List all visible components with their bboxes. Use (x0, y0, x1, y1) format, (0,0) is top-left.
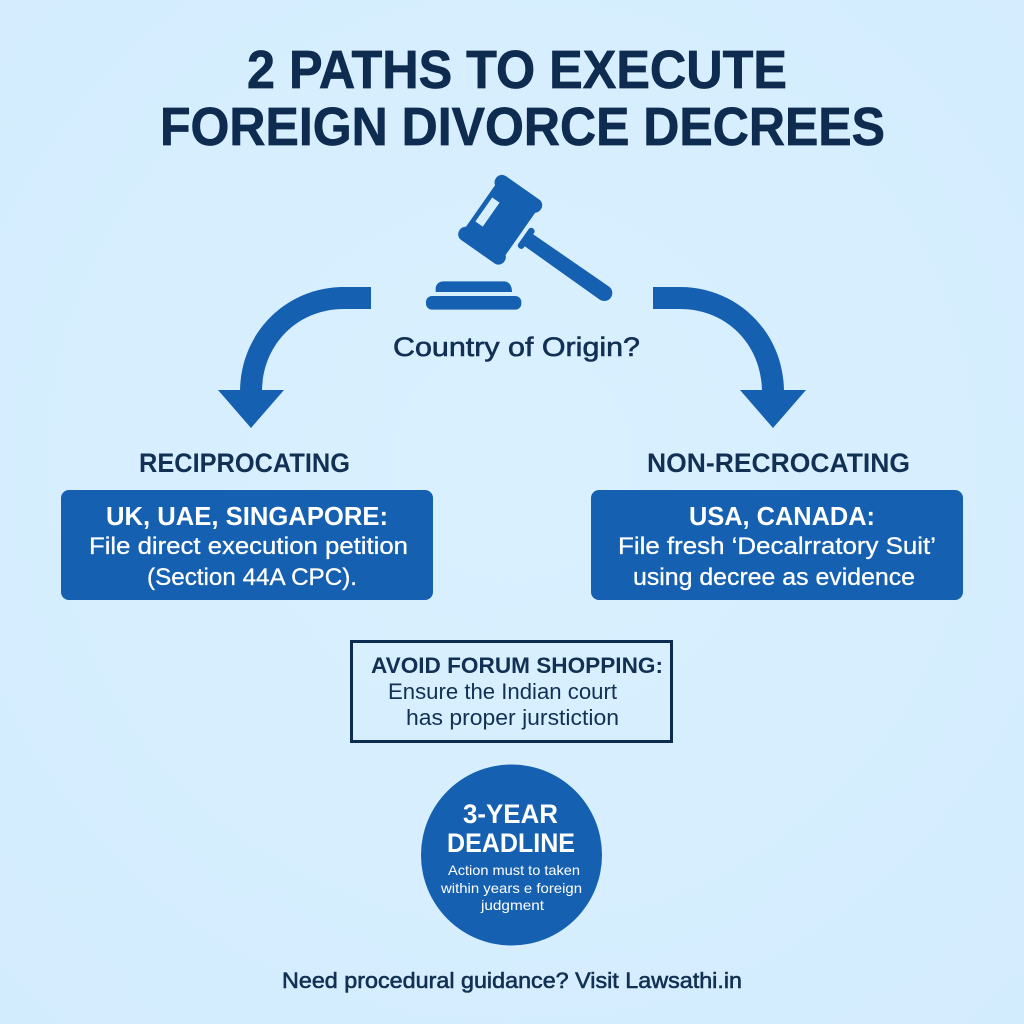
panel: reciprocating countries: File direct execution petition (89, 533, 408, 560)
arrow: left curve to reciprocating (218, 287, 371, 428)
heading: reciprocating: RECIPROCATING (139, 448, 350, 478)
heading: non-reciprocating: NON-RECROCATING (647, 448, 910, 478)
badge: 3-year deadline (421, 764, 602, 946)
title (160, 40, 885, 157)
panel: non-reciprocating countries (591, 490, 963, 600)
panel: non-reciprocating countries: USA, CANADA: (689, 501, 875, 531)
arrow: right curve to non-reciprocating (653, 287, 806, 428)
panel: non-reciprocating countries: using decree as evidence (633, 564, 915, 591)
badge: 3-year deadline: Action must to taken (448, 862, 580, 878)
badge: 3-year deadline: within years e foreign (440, 880, 582, 896)
icon: gavel (426, 172, 633, 329)
footer: call to action: Need procedural guidance? Visit Lawsathi.in (282, 968, 742, 993)
callout: avoid forum shopping: has proper jurstiction (406, 705, 619, 730)
title: FOREIGN DIVORCE DECREES (160, 97, 885, 157)
panel: non-reciprocating countries: File fresh ‘Decalrratory Suit’ (618, 533, 936, 560)
panel: reciprocating countries (61, 490, 433, 600)
question: country of origin: Country of Origin? (393, 332, 640, 362)
callout: avoid forum shopping (352, 642, 672, 742)
callout: avoid forum shopping: AVOID FORUM SHOPPING: (371, 653, 663, 678)
panel: reciprocating countries: UK, UAE, SINGAPORE: (106, 501, 388, 531)
badge: 3-year deadline: judgment (480, 897, 544, 913)
callout: avoid forum shopping: Ensure the Indian court (388, 679, 617, 704)
badge: 3-year deadline: 3-YEAR (463, 799, 558, 829)
title: 2 PATHS TO EXECUTE (247, 40, 787, 100)
panel: reciprocating countries: (Section 44A CPC). (147, 564, 357, 591)
badge: 3-year deadline: DEADLINE (447, 828, 575, 858)
